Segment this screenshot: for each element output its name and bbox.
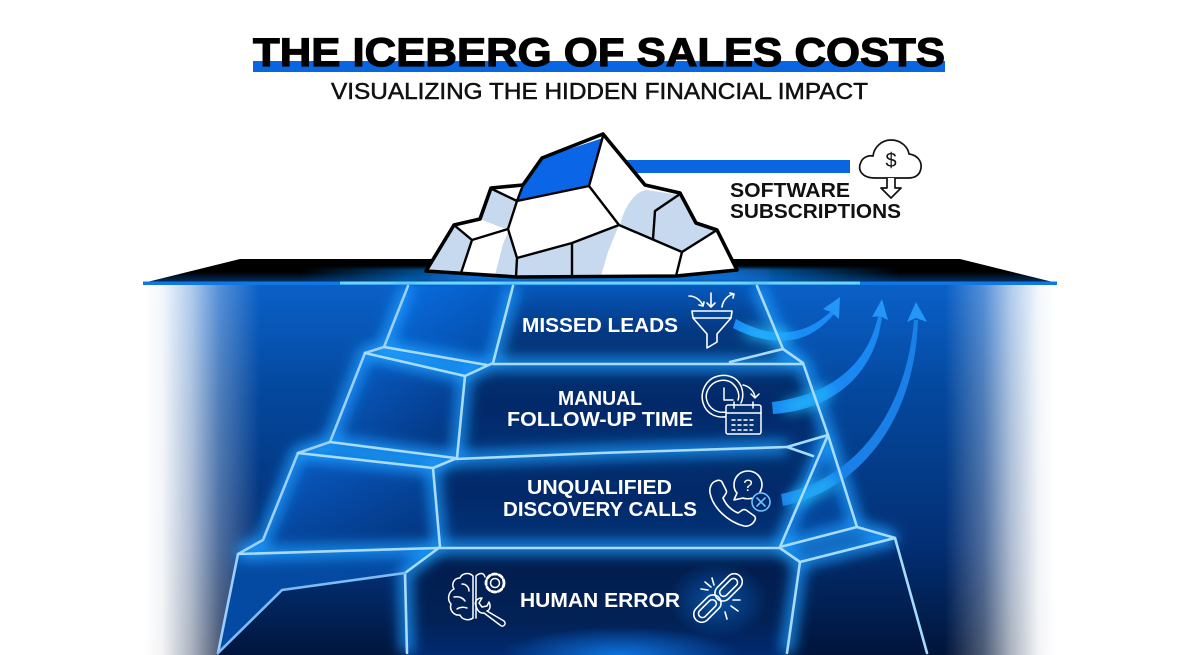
- label: software subscriptions: SOFTWARE: [730, 180, 850, 202]
- outline: [426, 134, 737, 277]
- submerged iceberg: [218, 286, 927, 655]
- iceberg wireframe: [218, 286, 927, 653]
- facet: right slab: [780, 527, 895, 562]
- icon: cloud with dollar: $: [885, 150, 897, 172]
- inner lines: [454, 136, 717, 277]
- subtitle: VISUALIZING THE HIDDEN FINANCIAL IMPACT: [331, 78, 868, 104]
- blue facet: [517, 138, 603, 201]
- label: human error: HUMAN ERROR: [520, 590, 681, 612]
- label: unqualified discovery calls: DISCOVERY CALLS: [503, 499, 697, 521]
- label: manual follow-up time: FOLLOW-UP TIME: [507, 409, 693, 431]
- facet: left upper: [384, 286, 513, 365]
- icon: funnel: [689, 293, 734, 348]
- iceberg wireframe glow: [238, 286, 895, 653]
- facet: left third: [238, 453, 440, 554]
- band: missed leads: [493, 286, 803, 363]
- facet: right base: [787, 538, 927, 655]
- icon: phone with question: [710, 471, 770, 526]
- arrow: missed leads outflow: [733, 297, 840, 341]
- arrow: discovery calls outflow: [781, 302, 927, 506]
- label: missed leads: MISSED LEADS: [522, 315, 678, 337]
- facet: left base: [218, 573, 407, 655]
- label: manual follow-up time: MANUAL: [558, 388, 642, 410]
- shaded facets: [426, 190, 717, 277]
- surface band: [143, 259, 1057, 285]
- label: software subscriptions: SUBSCRIPTIONS: [730, 201, 901, 223]
- arrow glows: [745, 330, 835, 500]
- iceberg tip: [426, 134, 737, 277]
- title: THE ICEBERG OF SALES COSTS: [253, 31, 945, 75]
- band: unqualified discovery calls: [433, 447, 813, 547]
- icon: phone with question: ?: [743, 476, 753, 495]
- callout bar: [627, 160, 850, 173]
- underwater background: [145, 285, 1055, 655]
- icon: cloud with dollar: [860, 140, 921, 198]
- label: unqualified discovery calls: UNQUALIFIED: [527, 477, 672, 499]
- icon: brain with gear and wrench: [449, 573, 505, 626]
- label: manual follow-up time: [507, 388, 693, 431]
- icon: clock and calendar: [702, 375, 761, 434]
- band: manual follow-up time: [455, 363, 828, 459]
- arrow: follow-up time outflow: [772, 299, 888, 414]
- label: software subscriptions: [730, 180, 901, 223]
- facet: left bottom: [218, 548, 438, 653]
- icon: broken chain: [690, 570, 746, 626]
- band: human error: [405, 547, 800, 655]
- facet: left second: [330, 353, 465, 458]
- glow: bottom of human error band: [500, 627, 740, 655]
- facet: right wedge: [780, 435, 857, 547]
- label: unqualified discovery calls: [503, 477, 697, 521]
- glow: behind chain icon: [668, 562, 768, 638]
